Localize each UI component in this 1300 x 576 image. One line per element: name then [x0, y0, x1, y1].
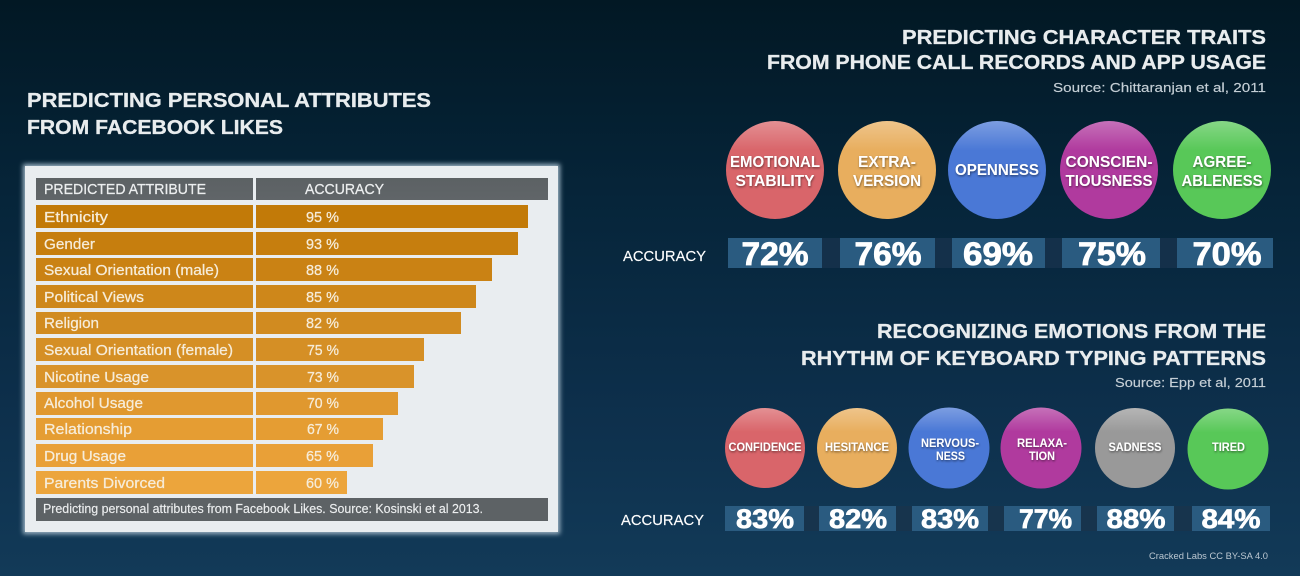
row: Nicotine Usage 73%: [36, 365, 414, 388]
accuracy row: emotions: 82%: [829, 504, 887, 534]
table footnote: [36, 498, 548, 521]
circle: extraversion: EXTRA-: [858, 154, 916, 171]
circle: confidence: [725, 408, 805, 488]
row: Parents Divorced 60%: Parents Divorced: [44, 475, 165, 492]
circle: emotional stability: [726, 121, 824, 219]
title: keyboard typing: RECOGNIZING EMOTIONS FROM THE: [877, 321, 1266, 343]
circle: nervousness: NERVOUS-: [921, 438, 979, 450]
accuracy row: character traits: 76%: [854, 236, 922, 272]
accuracy row: character traits: [623, 236, 1273, 272]
row: Relationship 67%: 67 %: [307, 421, 339, 438]
title: Facebook likes: FROM FACEBOOK LIKES: [27, 117, 283, 139]
row: Sexual Orientation (male) 88%: Sexual Orientation (male): [44, 262, 219, 279]
row: Drug Usage 65%: Drug Usage: [44, 448, 126, 465]
row: Nicotine Usage 73%: 73 %: [307, 369, 339, 386]
circle: openness: OPENNESS: [955, 162, 1039, 179]
circle: sadness: SADNESS: [1108, 442, 1162, 454]
row: Ethnicity 95%: [36, 205, 528, 228]
accuracy row: character traits: ACCURACY: [623, 248, 706, 265]
row: Alcohol Usage 70%: [36, 392, 398, 415]
accuracy row: character traits: 69%: [963, 236, 1033, 272]
row: Religion 82%: 82 %: [306, 315, 339, 332]
circles: character traits: [726, 121, 1271, 219]
title: phone call records: [767, 27, 1266, 74]
row: Parents Divorced 60%: 60 %: [306, 475, 339, 492]
circle: conscientiousness: TIOUSNESS: [1066, 173, 1152, 190]
accuracy row: emotions: 84%: [1202, 504, 1260, 534]
title: keyboard typing: [801, 321, 1266, 370]
circle: hesitance: [817, 408, 897, 488]
panel: Facebook likes table: [23, 164, 560, 534]
row: Nicotine Usage 73%: Nicotine Usage: [44, 369, 149, 386]
title: phone call records: FROM PHONE CALL RECORDS AND APP USAGE: [767, 52, 1266, 74]
row: Sexual Orientation (male) 88%: [36, 258, 492, 281]
row: Ethnicity 95%: 95 %: [306, 209, 339, 226]
circle: tired: [1188, 408, 1268, 490]
accuracy row: character traits: 75%: [1078, 236, 1146, 272]
table footnote: Predicting personal attributes from Facebook Likes. Source: Kosinski et al 2013.: [43, 502, 483, 516]
circle: tired: TIRED: [1212, 442, 1245, 454]
circle: extraversion: VERSION: [853, 173, 921, 190]
row: Political Views 85%: Political Views: [44, 289, 144, 306]
title: Facebook likes: [27, 90, 431, 139]
accuracy row: emotions: 77%: [1019, 504, 1072, 534]
circle: hesitance: HESITANCE: [825, 442, 889, 454]
accuracy row: emotions: [621, 504, 1270, 534]
table header: PREDICTED ATTRIBUTE: [44, 182, 206, 198]
circle: sadness: [1095, 408, 1175, 488]
row: Religion 82%: Religion: [44, 315, 99, 332]
circle: extraversion: [838, 121, 936, 219]
row: Drug Usage 65%: 65 %: [306, 448, 339, 465]
row: Political Views 85%: [36, 285, 476, 308]
circles: emotions: [725, 408, 1268, 490]
row: Drug Usage 65%: [36, 444, 373, 467]
circle: relaxation: RELAXA-: [1017, 438, 1067, 450]
accuracy row: emotions: 83%: [736, 504, 794, 534]
circle: emotional stability: EMOTIONAL: [730, 154, 820, 171]
row: Sexual Orientation (female) 75%: [36, 338, 424, 361]
circle: agreeableness: ABLENESS: [1182, 173, 1262, 190]
row: Sexual Orientation (male) 88%: 88 %: [306, 262, 339, 279]
circle: nervousness: [908, 408, 990, 488]
row: Sexual Orientation (female) 75%: Sexual Orientation (female): [44, 342, 233, 359]
circle: emotional stability: STABILITY: [736, 173, 815, 190]
row: Relationship 67%: Relationship: [44, 421, 132, 438]
circle: conscientiousness: CONSCIEN-: [1066, 154, 1152, 171]
circle: conscientiousness: [1060, 121, 1158, 219]
circle: agreeableness: [1173, 121, 1271, 219]
accuracy row: emotions: 83%: [921, 504, 979, 534]
row: Sexual Orientation (female) 75%: 75 %: [307, 342, 339, 359]
circle: confidence: CONFIDENCE: [728, 442, 802, 454]
row: Gender 93%: 93 %: [306, 236, 339, 253]
row: Political Views 85%: 85 %: [306, 289, 339, 306]
row: Parents Divorced 60%: [36, 471, 347, 494]
row: Gender 93%: Gender: [44, 236, 95, 253]
circle: nervousness: NESS: [936, 451, 965, 463]
title: phone call records: PREDICTING CHARACTER TRAITS: [902, 27, 1266, 49]
source: Chittaranjan: Source: Chittaranjan et al, 2011: [1053, 80, 1266, 95]
accuracy row: character traits: 72%: [742, 236, 808, 272]
row: Alcohol Usage 70%: Alcohol Usage: [44, 395, 143, 412]
circle: agreeableness: AGREE-: [1192, 154, 1252, 171]
table header: [36, 178, 548, 200]
circle: openness: [948, 121, 1046, 219]
row: Relationship 67%: [36, 418, 383, 440]
row: Ethnicity 95%: Ethnicity: [44, 209, 109, 226]
table header: ACCURACY: [305, 182, 384, 198]
row: Religion 82%: [36, 312, 461, 334]
circle: relaxation: [1000, 408, 1082, 488]
row: Gender 93%: [36, 232, 518, 255]
accuracy row: emotions: 88%: [1106, 504, 1166, 534]
circle: relaxation: TION: [1029, 451, 1055, 463]
accuracy row: character traits: 70%: [1192, 236, 1262, 272]
title: Facebook likes: PREDICTING PERSONAL ATTRIBUTES: [27, 90, 431, 112]
row: Alcohol Usage 70%: 70 %: [307, 395, 339, 412]
title: keyboard typing: RHYTHM OF KEYBOARD TYPING PATTERNS: [801, 348, 1266, 370]
source: Epp: Source: Epp et al, 2011: [1115, 375, 1266, 390]
credit: Cracked Labs CC BY-SA 4.0: [1149, 551, 1268, 562]
accuracy row: emotions: ACCURACY: [621, 512, 704, 529]
